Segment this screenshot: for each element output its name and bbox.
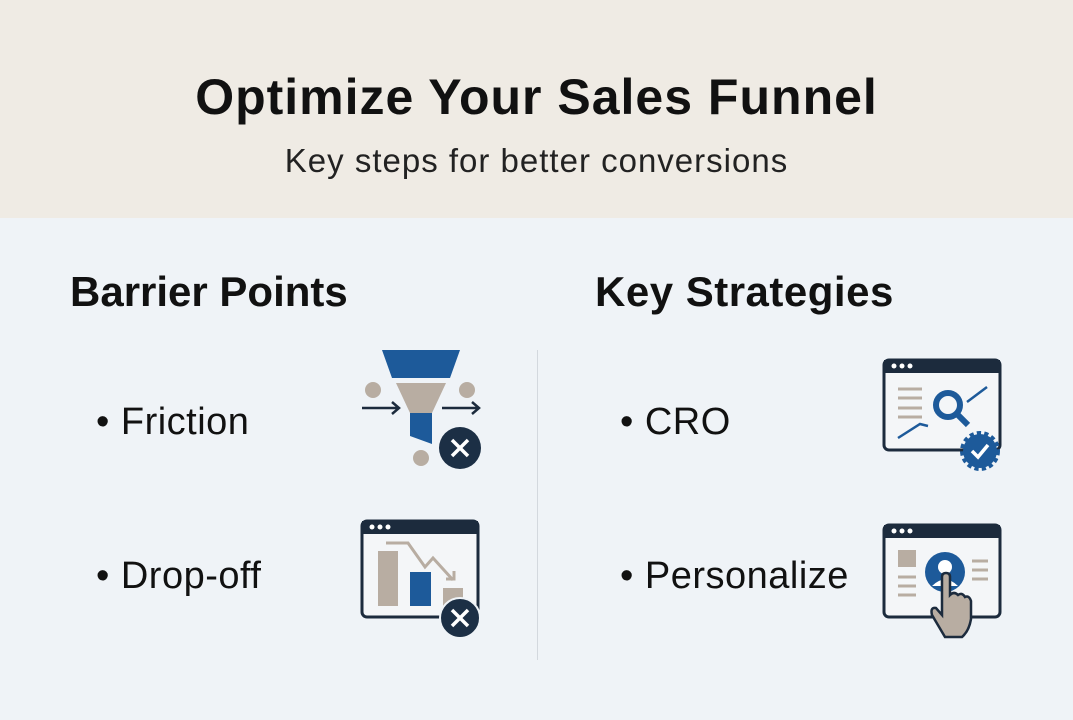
divider: [537, 350, 538, 660]
bullet: personalize: • Personalize: [620, 555, 849, 597]
subtitle: Key steps for better conversions: [285, 142, 788, 179]
icon: funnel: [362, 350, 481, 469]
bullet: CRO: • CRO: [620, 401, 731, 443]
icon: CRO window: [882, 358, 1002, 471]
title: Optimize Your Sales Funnel: [195, 69, 878, 125]
heading: key strategies: Key Strategies: [595, 268, 894, 315]
bullet: drop-off: • Drop-off: [96, 555, 261, 597]
bullet: friction: • Friction: [96, 401, 249, 443]
header band: [0, 0, 1073, 218]
icon: personalize window: [882, 524, 1002, 638]
icon: drop-off window: [360, 520, 480, 637]
heading: barrier points: Barrier Points: [70, 268, 348, 315]
